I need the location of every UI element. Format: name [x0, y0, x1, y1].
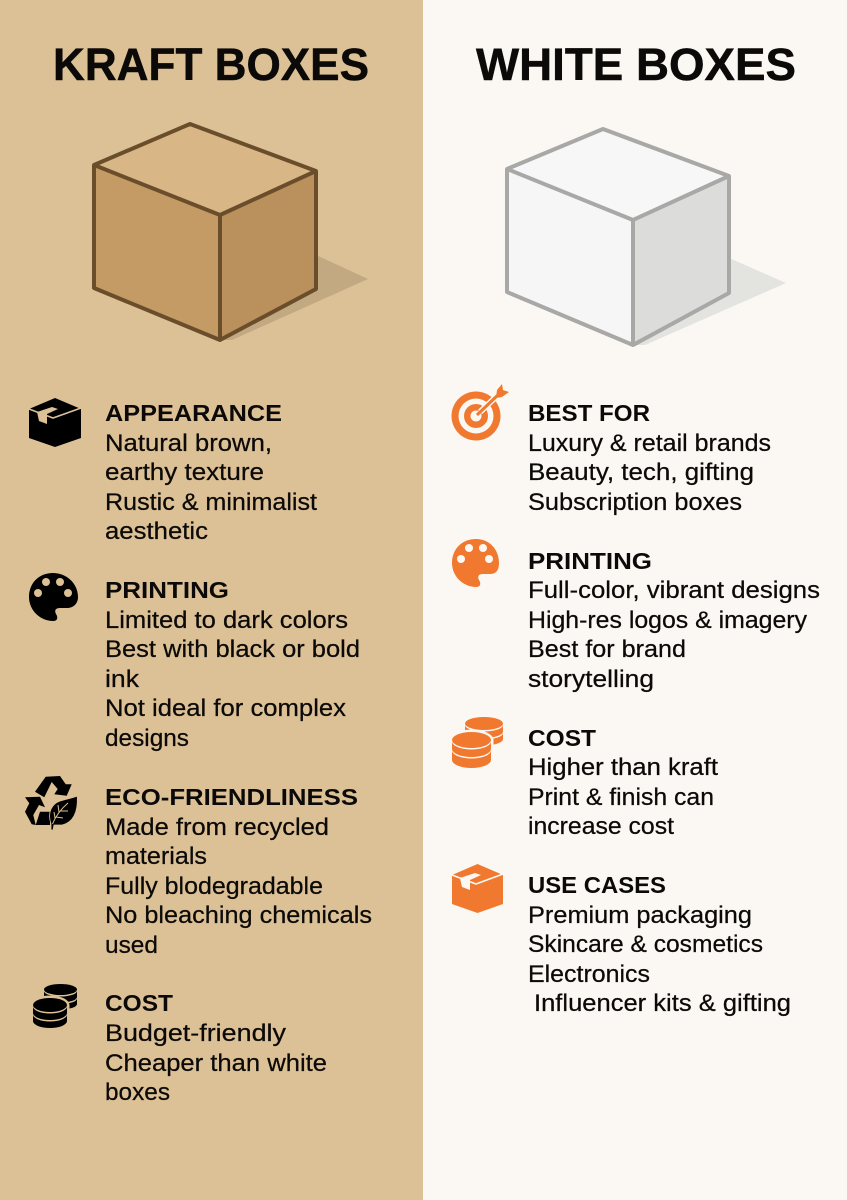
text: use cases details	[528, 902, 791, 1017]
text: printing details: Not ideal for complex	[105, 695, 346, 722]
icon: coins	[30, 984, 77, 1030]
text: printing details: Best with black or bold	[105, 636, 360, 663]
text: printing details: Limited to dark colors	[105, 607, 348, 634]
text: printing details	[528, 577, 820, 693]
heading: printing: PRINTING	[528, 548, 652, 574]
text: printing details: storytelling	[528, 666, 654, 693]
text: appearance details: aesthetic	[105, 518, 208, 545]
panel: kraft boxes	[0, 0, 423, 1200]
heading: printing: PRINTING	[105, 577, 229, 603]
text: cost details	[105, 1020, 327, 1106]
text: printing details: Full-color, vibrant designs	[528, 577, 820, 604]
section: eco-friendliness	[25, 776, 372, 959]
section: printing	[29, 573, 360, 752]
text: appearance details: Rustic & minimalist	[105, 489, 317, 516]
title: white boxes: WHITE BOXES	[476, 39, 796, 90]
text: printing details	[105, 607, 360, 752]
text: cost details: Higher than kraft	[528, 754, 718, 781]
title: kraft boxes: KRAFT BOXES	[53, 39, 369, 90]
panel: white boxes	[423, 0, 847, 1200]
heading: eco-friendliness: ECO-FRIENDLINESS	[105, 784, 358, 810]
heading: cost: COST	[105, 990, 173, 1016]
section: use cases	[452, 864, 791, 1017]
heading: use cases: USE CASES	[528, 872, 666, 898]
text: best for details: Luxury & retail brands	[528, 430, 771, 457]
text: use cases details: Electronics	[528, 961, 650, 988]
text: cost details: Budget-friendly	[105, 1020, 286, 1047]
icon: coins	[450, 717, 503, 770]
illustration: white box	[507, 129, 786, 345]
icon: palette	[29, 573, 78, 621]
text: eco-friendliness details: materials	[105, 843, 207, 870]
section: best for	[452, 384, 771, 516]
text: printing details: High-res logos & imagery	[528, 607, 807, 634]
text: appearance details: earthy texture	[105, 459, 264, 486]
heading: best for: BEST FOR	[528, 400, 650, 426]
text: eco-friendliness details: Made from recycled	[105, 814, 329, 841]
text: printing details: Best for brand	[528, 636, 686, 663]
text: appearance details: Natural brown,	[105, 430, 272, 457]
text: use cases details: Skincare & cosmetics	[528, 931, 763, 958]
text: best for details: Subscription boxes	[528, 489, 742, 516]
icon: package	[29, 398, 81, 447]
section: white printing	[452, 539, 820, 693]
section: kraft cost	[30, 984, 327, 1106]
icon: palette	[452, 539, 499, 587]
icon: package	[452, 864, 503, 913]
text: eco-friendliness details	[105, 814, 372, 959]
heading: appearance: APPEARANCE	[105, 400, 282, 426]
text: use cases details: Influencer kits & gifting	[534, 990, 791, 1017]
section: white cost	[450, 717, 718, 840]
icon: target	[452, 384, 509, 440]
text: best for details: Beauty, tech, gifting	[528, 459, 754, 486]
heading: cost: COST	[528, 725, 596, 751]
text: eco-friendliness details: Fully blodegradable	[105, 873, 323, 900]
text: best for details	[528, 430, 771, 516]
text: appearance details	[105, 430, 317, 545]
text: use cases details: Premium packaging	[528, 902, 752, 929]
illustration: kraft box	[94, 124, 368, 340]
icon: recycling leaf	[25, 776, 77, 830]
text: cost details: Print & finish can	[528, 784, 714, 811]
section: appearance	[29, 398, 317, 545]
text: cost details: boxes	[105, 1079, 170, 1106]
text: cost details: Cheaper than white	[105, 1050, 327, 1077]
text: printing details: ink	[105, 666, 140, 693]
text: cost details	[528, 754, 718, 840]
text: eco-friendliness details: used	[105, 932, 158, 959]
text: printing details: designs	[105, 725, 189, 752]
text: cost details: increase cost	[528, 813, 674, 840]
text: eco-friendliness details: No bleaching chemicals	[105, 902, 372, 929]
